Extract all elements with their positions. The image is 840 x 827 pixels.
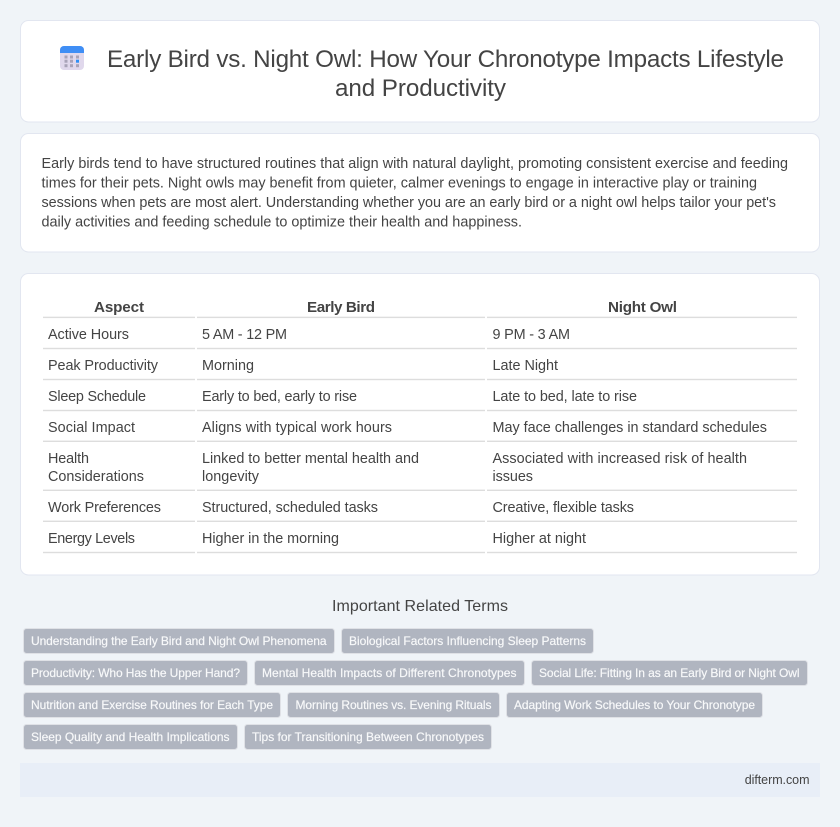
tag: [24, 724, 238, 750]
row: work preferences: Creative, flexible tasks: [492, 500, 634, 516]
table header row: [94, 299, 677, 316]
row: energy levels: [48, 531, 586, 547]
row: energy levels: Higher in the morning: [202, 531, 339, 547]
row: peak productivity: [48, 358, 558, 374]
text block: description paragraph: times for their pets. Night owls may benefit from quieter, calmer evenings to engage in interactive play or training: [42, 176, 757, 192]
tag: Adapting Work Schedules to Your Chronotype: [514, 698, 755, 712]
text block: description paragraph: Early birds tend to have structured routines that align with natural daylight, promoting consistent exercise and feeding: [42, 156, 788, 172]
table header row: Early Bird: [307, 299, 375, 316]
tag: [24, 628, 334, 654]
tag: Productivity: Who Has the Upper Hand?: [31, 666, 240, 680]
row: active hours: 9 PM - 3 AM: [492, 327, 570, 343]
tag: [24, 692, 280, 718]
row: sleep schedule: Early to bed, early to rise: [202, 389, 357, 405]
row: social impact: May face challenges in standard schedules: [492, 420, 767, 436]
row: energy levels: Energy Levels: [48, 531, 135, 547]
title: and Productivity: [335, 75, 507, 102]
icon: calendar: [60, 46, 84, 70]
tag: Nutrition and Exercise Routines for Each Type: [31, 698, 273, 712]
text block: description paragraph: sessions when pets are most alert. Understanding whether you are an early bird or a night owl helps tailor your pet's: [42, 195, 776, 211]
row: work preferences: Work Preferences: [48, 500, 161, 516]
panel: comparison table: [20, 274, 820, 575]
row: sleep schedule: Sleep Schedule: [48, 389, 146, 405]
row: active hours: 5 AM - 12 PM: [202, 327, 287, 343]
row: health considerations: longevity: [202, 469, 260, 485]
tag: [342, 628, 594, 654]
tag: Understanding the Early Bird and Night Owl Phenomena: [31, 634, 327, 648]
tag: [254, 660, 524, 686]
row: health considerations: Associated with increased risk of health: [492, 451, 747, 467]
text block: description paragraph: daily activities and feeding schedule to optimize their health and happiness.: [42, 214, 522, 230]
tag: Sleep Quality and Health Implications: [31, 730, 230, 744]
footer source text: difterm.com: [745, 773, 810, 787]
tag: Morning Routines vs. Evening Rituals: [296, 698, 492, 712]
tag: [506, 692, 762, 718]
tag: [288, 692, 500, 718]
row: active hours: [48, 327, 570, 343]
row: active hours: Active Hours: [48, 327, 129, 343]
title: [107, 46, 784, 102]
row: health considerations: Linked to better mental health and: [202, 451, 419, 467]
tag group: related terms: [24, 628, 808, 750]
row: work preferences: Structured, scheduled tasks: [202, 500, 378, 516]
row: energy levels: Higher at night: [492, 531, 586, 547]
row: health considerations: [48, 451, 747, 485]
tag: [532, 660, 808, 686]
heading: important related terms: Important Related Terms: [332, 598, 508, 615]
row: social impact: Aligns with typical work hours: [202, 420, 392, 436]
row: health considerations: issues: [492, 469, 533, 485]
row: peak productivity: Morning: [202, 358, 254, 374]
table header row: Night Owl: [608, 299, 677, 316]
tag: Mental Health Impacts of Different Chronotypes: [262, 666, 516, 680]
row: social impact: Social Impact: [48, 420, 135, 436]
tag: Social Life: Fitting In as an Early Bird or Night Owl: [539, 666, 800, 680]
panel: description: [20, 134, 820, 252]
row: health considerations: Considerations: [48, 469, 144, 485]
row: work preferences: [48, 500, 634, 516]
title: Early Bird vs. Night Owl: How Your Chronotype Impacts Lifestyle: [107, 46, 784, 73]
row: sleep schedule: [48, 389, 637, 405]
row: peak productivity: Peak Productivity: [48, 358, 159, 374]
tag: [24, 660, 248, 686]
tag: Biological Factors Influencing Sleep Patterns: [349, 634, 586, 648]
row: sleep schedule: Late to bed, late to rise: [492, 389, 637, 405]
footer: [20, 763, 820, 797]
tag: Tips for Transitioning Between Chronotypes: [252, 730, 484, 744]
tag: [244, 724, 492, 750]
row: peak productivity: Late Night: [492, 358, 558, 374]
text block: description paragraph: [42, 156, 788, 230]
row: health considerations: Health: [48, 451, 89, 467]
panel: title header: [20, 20, 820, 122]
row: social impact: [48, 420, 767, 436]
table header row: Aspect: [94, 299, 144, 316]
